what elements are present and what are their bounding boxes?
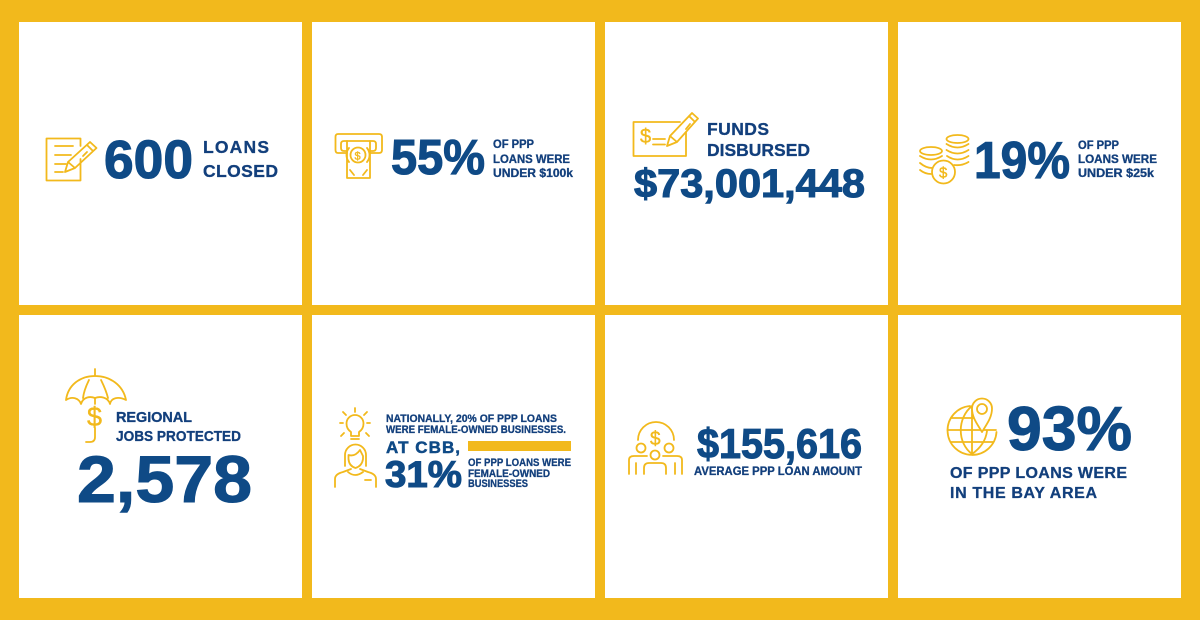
panel: 19 percent under 25k	[898, 22, 1181, 305]
stat: 19%: 19%	[974, 132, 1070, 190]
icon: umbrella with dollar handle: $	[87, 402, 102, 432]
label: of PPP loans were in the bay area: IN THE BAY AREA	[950, 485, 1097, 502]
icon: people under dollar arc: $	[650, 429, 661, 450]
panel: funds disbursed	[605, 22, 888, 305]
heading: at CBB: AT CBB,	[386, 438, 460, 457]
stat: $155,616: $155,616	[697, 420, 862, 467]
label: of PPP loans were female-owned businesses: BUSINESSES	[468, 478, 528, 490]
stat: $73,001,448: $73,001,448	[634, 162, 865, 206]
label: funds disbursed: FUNDS	[707, 119, 769, 139]
icon: document and pencil	[46, 138, 96, 180]
label: of PPP loans were under $100k: OF PPP	[493, 137, 534, 151]
panel: regional jobs protected	[19, 315, 302, 598]
icon: coin stacks	[920, 135, 968, 184]
icon: people under dollar arc	[629, 422, 682, 474]
label: of PPP loans were under $25k: OF PPP	[1078, 138, 1119, 152]
stat: 93%: 93%	[1007, 395, 1132, 464]
icon: cheque and pencil	[634, 113, 698, 156]
label: average PPP loan amount: AVERAGE PPP LOAN AMOUNT	[694, 466, 862, 478]
label: regional jobs protected: JOBS PROTECTED	[116, 429, 241, 445]
label: of PPP loans were under $25k: LOANS WERE	[1078, 152, 1157, 166]
label: funds disbursed: DISBURSED	[707, 140, 810, 160]
label: loans closed: CLOSED	[203, 161, 278, 181]
panel: average loan amount	[605, 315, 888, 598]
label: of PPP loans were under $25k: UNDER $25k	[1078, 166, 1154, 180]
icon: woman	[335, 445, 376, 487]
label: regional jobs protected: REGIONAL	[116, 410, 192, 426]
stat: 2,578: 2,578	[77, 442, 252, 516]
highlight bar	[468, 441, 571, 451]
icon: cash machine	[336, 134, 382, 178]
panel: 93 percent in bay area	[898, 315, 1181, 598]
label: loans closed	[203, 137, 278, 181]
label: regional jobs protected	[116, 410, 241, 445]
stat: 55%: 55%	[391, 131, 485, 185]
label: of PPP loans were in the bay area	[950, 465, 1127, 502]
panel: 55 percent under 100k	[312, 22, 595, 305]
icon: cheque and pencil: $	[640, 126, 651, 148]
label: of PPP loans were in the bay area: OF PPP LOANS WERE	[950, 465, 1127, 482]
label: funds disbursed	[707, 119, 810, 160]
icon: umbrella with dollar handle	[66, 369, 126, 442]
label: of PPP loans were under $100k: UNDER $100k	[493, 166, 573, 180]
label: of PPP loans were female-owned businesses	[468, 457, 571, 490]
stat: 600: 600	[104, 130, 193, 190]
label: of PPP loans were female-owned businesses: OF PPP LOANS WERE	[468, 457, 571, 469]
text: national share	[386, 413, 566, 436]
panel: loans closed	[19, 22, 302, 305]
label: of PPP loans were under $100k	[493, 137, 573, 180]
panel: female-owned businesses	[312, 315, 595, 598]
icon: coin stacks: $	[939, 164, 948, 182]
stat: 31%: 31%	[385, 454, 462, 495]
label: of PPP loans were female-owned businesses: FEMALE-OWNED	[468, 468, 550, 480]
icon: globe and map pin	[948, 399, 996, 455]
text: national share: WERE FEMALE-OWNED BUSINESSES.	[386, 424, 566, 436]
icon: light bulb	[340, 408, 370, 439]
icon: cash machine: $	[354, 150, 361, 162]
label: loans closed: LOANS	[203, 137, 269, 157]
label: of PPP loans were under $25k	[1078, 138, 1157, 180]
label: of PPP loans were under $100k: LOANS WERE	[493, 152, 570, 166]
text: national share: NATIONALLY, 20% OF PPP LOANS	[386, 413, 557, 425]
